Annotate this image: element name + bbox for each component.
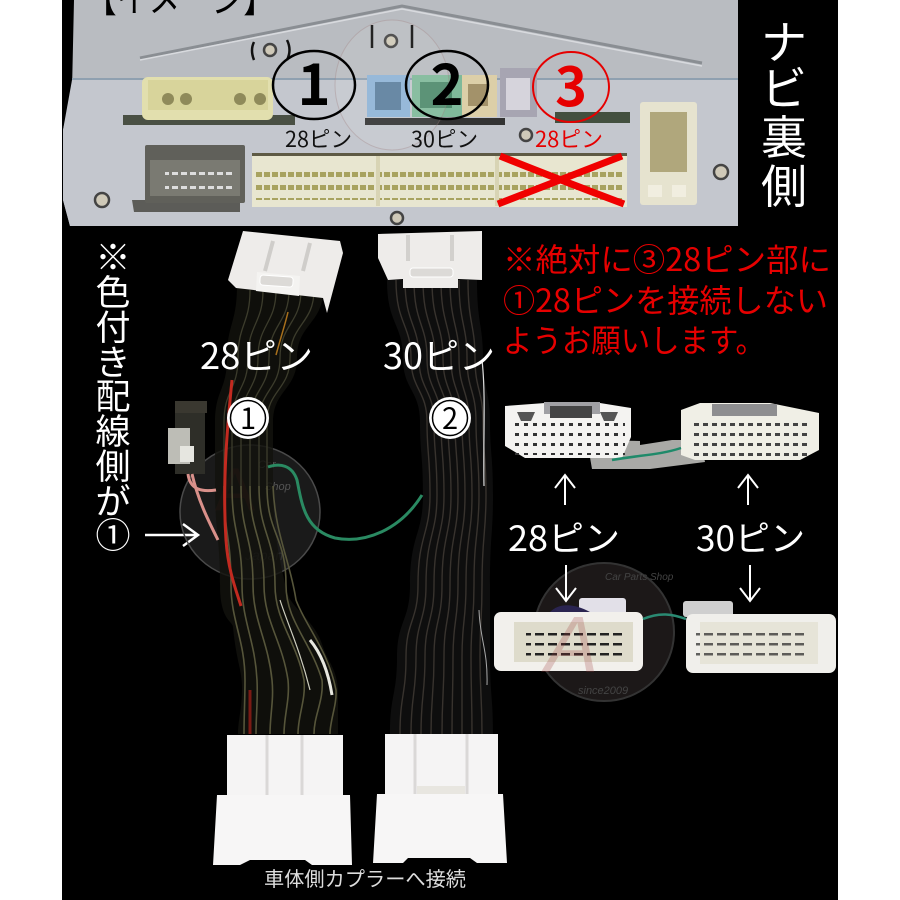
label: 28 pin: 28ピン: [285, 122, 352, 154]
vertical note: coloured wiring side is 1: ※: [95, 230, 131, 281]
marker: circle 1: [273, 41, 355, 122]
vertical note: coloured wiring side is 1: 線: [95, 404, 131, 455]
title: vertical nav rear label: ビ: [761, 53, 807, 119]
title: vertical nav rear label: 側: [761, 151, 807, 217]
warning text red: ※絶対に③28ピン部に: [503, 235, 831, 281]
watermark: harness centre: [180, 445, 320, 579]
connector: harness 1 top white plug: [228, 231, 343, 313]
connector: yellow power: [123, 77, 295, 125]
connector photo: bottom pair front view: [494, 598, 836, 673]
grey bridge: [587, 440, 705, 469]
connector photo: top pair rear view: [505, 402, 819, 469]
watermark: harness centre: Japan: [244, 547, 283, 563]
connectors: center coloured group: [365, 68, 537, 125]
icon: red cross: [498, 156, 624, 204]
marker: circle 2: 2: [430, 41, 464, 122]
connector: harness 1 bottom plug: [213, 735, 352, 865]
connector: harness 2 top white plug: [378, 231, 482, 288]
watermark: right lower: Car Parts Shop: [605, 572, 674, 583]
label: 28 pin red: 28ピン: [535, 122, 603, 154]
panel: navigation unit rear photo: [63, 0, 738, 226]
vertical note: coloured wiring side is 1: が: [95, 474, 131, 525]
badge: circled 2 on harness: [429, 396, 471, 439]
vertical note: coloured wiring side is 1: ①: [95, 508, 131, 559]
watermark: harness centre: Car: [258, 459, 277, 471]
watermark: photo: [335, 20, 449, 150]
watermark: logo A over lower connector: A: [541, 600, 598, 689]
board: right edge pcb: [555, 112, 630, 123]
vertical note: coloured wiring side is 1: 側: [95, 439, 131, 490]
badge: circled 2 on harness: 2: [442, 396, 458, 438]
title: vertical nav rear label: 裏: [761, 102, 807, 168]
arrow: down to 28 pin: [556, 565, 576, 601]
arrow: pointing to harness 1: [145, 524, 198, 546]
watermark: right lower: since2009: [578, 685, 628, 697]
photo: unit chassis: [63, 0, 738, 226]
wire: green link: [612, 448, 681, 460]
label: 28 pin right: 28ピン: [508, 511, 620, 562]
harness: wire bundle 2: [387, 280, 493, 734]
label: 30 pin on harness 2: 30ピン: [383, 328, 495, 380]
arrow: up to 30 pin: [738, 475, 758, 505]
label: 28 pin on harness 1: 28ピン: [200, 328, 313, 380]
warning text red: ようお願いします。: [503, 316, 765, 362]
marker: circle 1: 1: [297, 41, 331, 122]
mounting marks: black arcs: [252, 25, 412, 60]
arrow: up to 28 pin: [555, 475, 575, 505]
caption: connect to vehicle side coupler: 車体側カプラーへ接続: [264, 863, 466, 892]
title: vertical nav rear label: ナ: [761, 7, 807, 73]
connector: 30 pin socket: [681, 403, 819, 460]
screws: [95, 35, 728, 224]
marker: circle 2: [406, 41, 488, 122]
vertical note: coloured wiring side is 1: 配: [95, 369, 131, 420]
wire: green jumper: [268, 465, 422, 539]
vertical note: coloured wiring side is 1: 付: [95, 300, 131, 351]
vertical note: coloured wiring side is 1: き: [95, 335, 131, 386]
wires: pink branch: [188, 474, 218, 540]
connector: right white vertical: [640, 102, 697, 205]
warning text red: ①28ピンを接続しない: [503, 276, 828, 322]
watermark: right lower: [534, 563, 674, 701]
title: vertical nav rear label: [761, 7, 807, 217]
badge: circled 1 on harness: [227, 396, 269, 439]
connector: 30 pin plug: [683, 601, 836, 673]
watermark: harness centre: Shop: [265, 481, 291, 493]
connector: harness 2 bottom plug: [373, 734, 507, 863]
vertical note: coloured wiring side is 1: [95, 230, 131, 559]
wire: green link lower: [643, 614, 686, 619]
marker: circle 3 red: 3: [555, 43, 587, 122]
watermark: harness centre: A: [215, 456, 255, 523]
connector: small black relay plug: [168, 401, 207, 474]
connector: grey block: [132, 145, 245, 212]
warning text red: [503, 235, 831, 362]
vertical note: coloured wiring side is 1: 色: [95, 265, 131, 316]
marker: circle 3 red: [533, 43, 609, 122]
arrow: down to 30 pin: [740, 565, 760, 601]
badge: circled 1 on harness: 1: [240, 396, 256, 438]
connector: large wide white block: [252, 153, 627, 207]
connector: 28 pin socket: [505, 402, 631, 458]
label: 30 pin right: 30ピン: [696, 511, 805, 562]
harness: wire bundle 1: [215, 285, 338, 734]
label: 30 pin: 30ピン: [411, 122, 478, 154]
connector: 28 pin plug: [494, 598, 643, 671]
